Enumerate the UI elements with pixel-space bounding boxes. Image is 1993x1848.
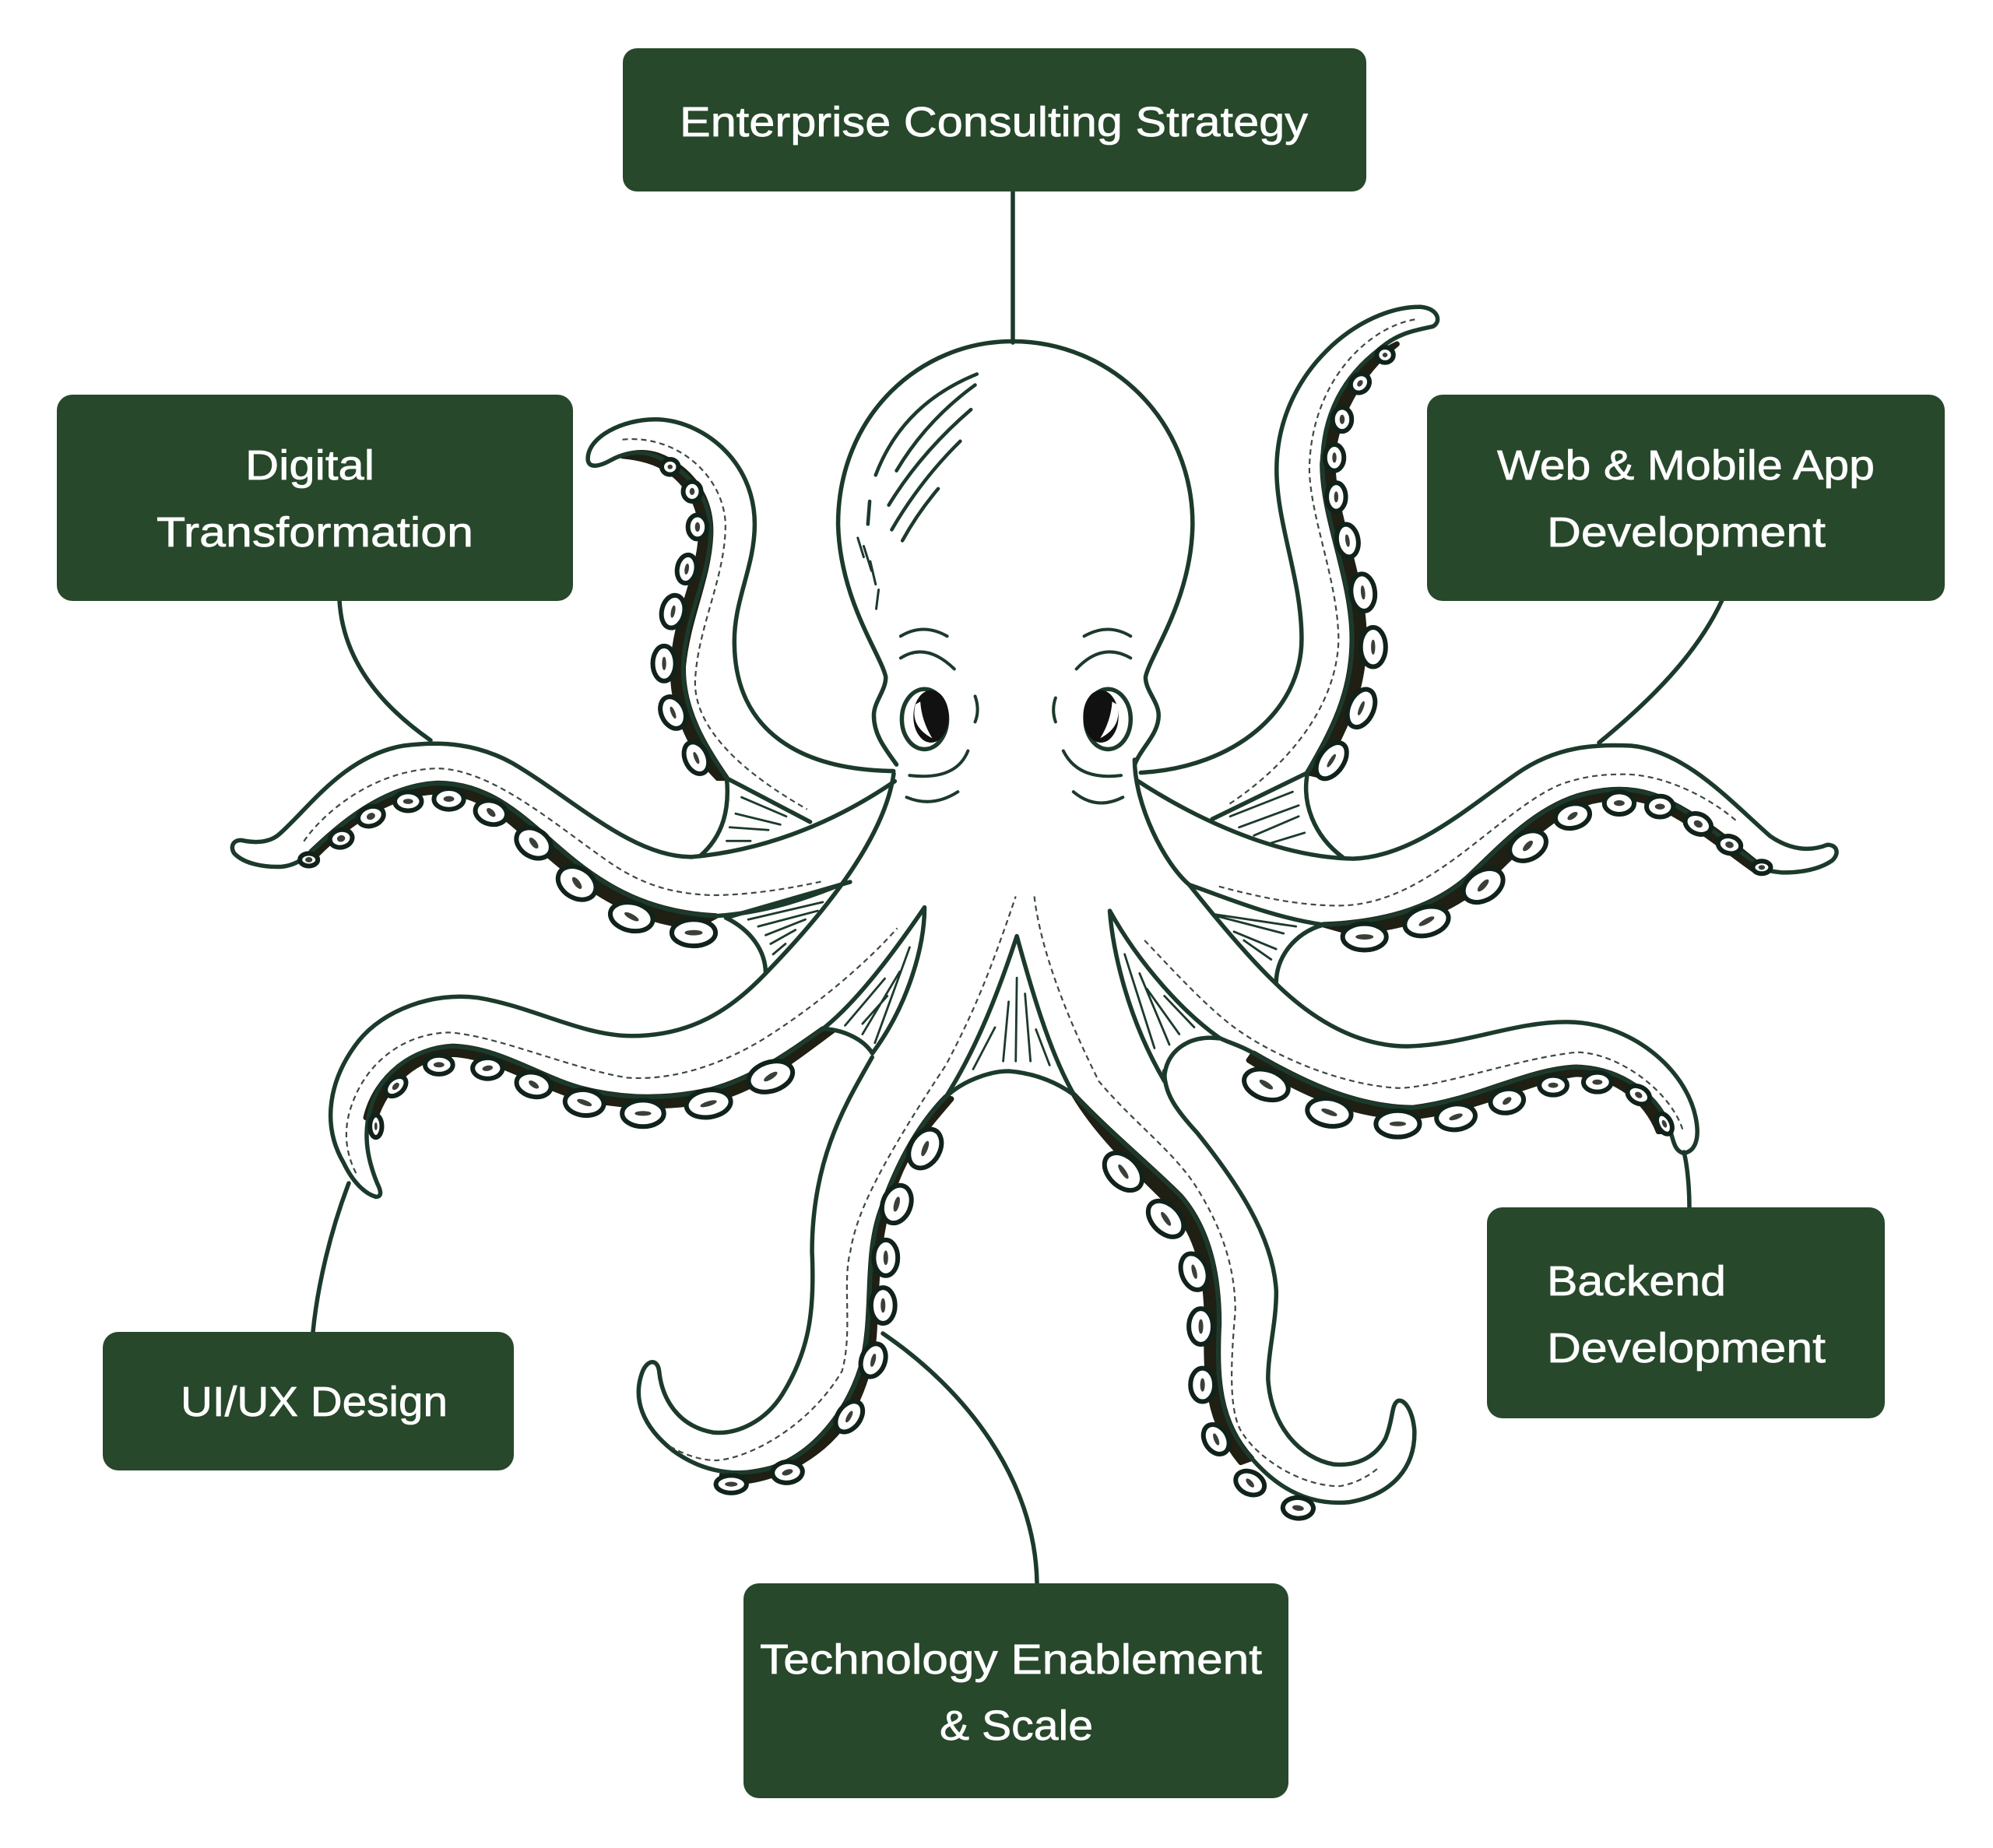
right tentacle <box>1137 745 1837 984</box>
box: Technology Enablement & Scale <box>743 1583 1288 1798</box>
lower-right tentacle <box>1110 760 1697 1153</box>
box: Enterprise Consulting Strategy <box>623 48 1366 191</box>
box: Enterprise Consulting Strategy: Enterprise Consulting Strategy <box>680 99 1308 146</box>
box: Web & Mobile App Development: Development <box>1547 509 1826 556</box>
box: Technology Enablement & Scale: & Scale <box>940 1702 1093 1749</box>
box: Digital Transformation <box>57 395 573 601</box>
box: Backend Development: Development <box>1547 1325 1826 1372</box>
box: Digital Transformation: Transformation <box>156 509 473 556</box>
box: Web & Mobile App Development: Web & Mobile App <box>1497 442 1875 489</box>
octopus illustration <box>232 307 1837 1521</box>
lower-left tentacle <box>331 774 925 1196</box>
box: Backend Development <box>1487 1207 1885 1418</box>
bottom tentacles <box>638 897 1415 1521</box>
box: Backend Development: Backend <box>1547 1258 1726 1305</box>
box: UI/UX Design: UI/UX Design <box>181 1379 448 1425</box>
octopus head <box>838 341 1193 803</box>
connector lines <box>313 191 1722 1583</box>
left eye <box>902 689 947 749</box>
box: Digital Transformation: Digital <box>245 442 374 489</box>
box: Web & Mobile App Development <box>1427 395 1945 601</box>
upper-right tentacle <box>1141 307 1438 857</box>
upper-left tentacle <box>588 420 894 856</box>
left tentacle <box>232 743 895 973</box>
box: UI/UX Design <box>103 1332 514 1470</box>
right eye <box>1085 689 1130 749</box>
box: Technology Enablement & Scale: Technology Enablement <box>760 1636 1262 1683</box>
